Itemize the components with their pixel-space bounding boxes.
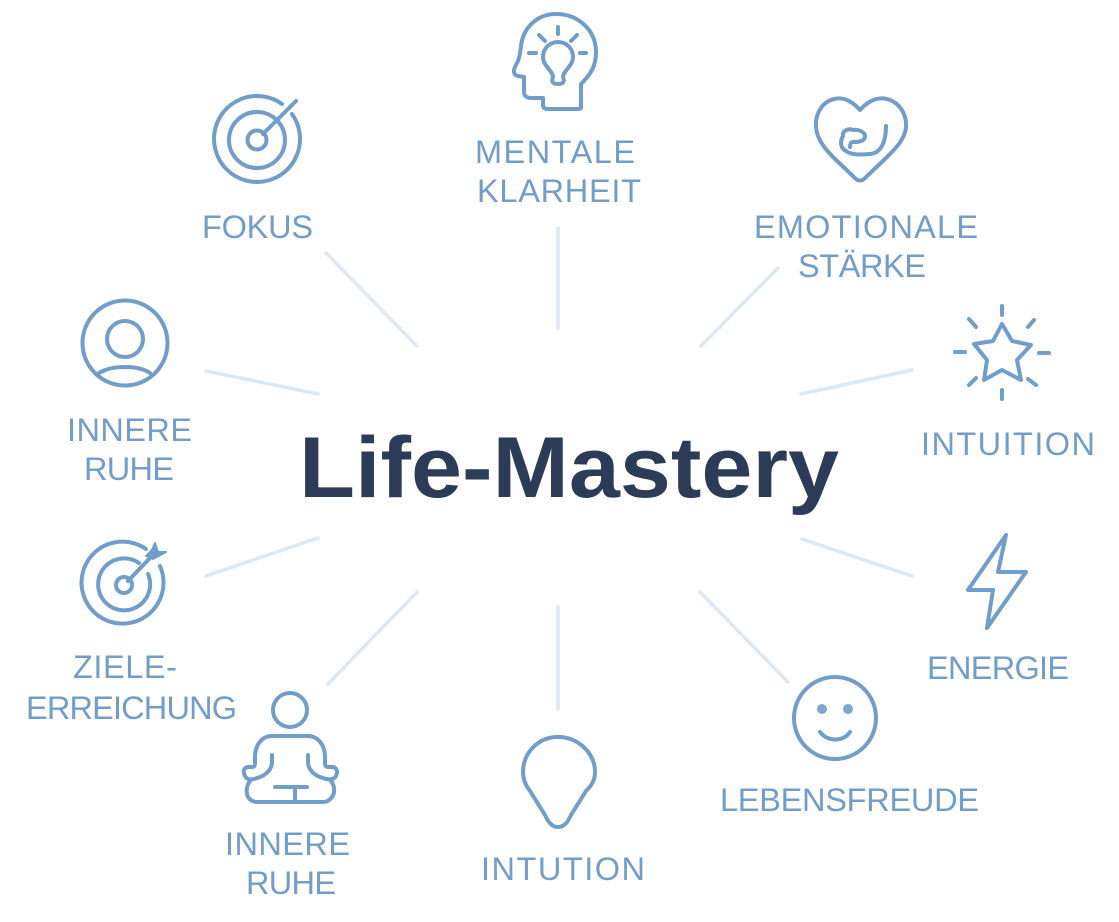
icon: lightning bolt — [968, 535, 1026, 628]
icon: drop pin — [523, 737, 595, 827]
icon: heart with swirl — [816, 98, 906, 180]
label: Intution: INTUTION — [481, 851, 645, 887]
title: Life-Mastery — [299, 420, 839, 516]
label: Ziele-Erreichung: ZIELE- — [73, 649, 177, 685]
icon: head with light bulb — [514, 14, 596, 109]
label: Ziele-Erreichung: ERREICHUNG — [26, 690, 237, 726]
icon: person in circle — [82, 300, 168, 386]
icon: meditating person — [244, 693, 337, 802]
label: Fokus: FOKUS — [202, 209, 313, 245]
label: Innere Ruhe: INNERE — [67, 412, 192, 448]
label: Mentale Klarheit: MENTALE — [475, 134, 635, 170]
icon: target with arrow — [82, 542, 166, 624]
label: Lebensfreude: LEBENSFREUDE — [720, 782, 979, 818]
label: Mentale Klarheit: KLARHEIT — [477, 173, 641, 209]
label: Innere Ruhe, lower: RUHE — [246, 865, 336, 901]
icon: target with line — [214, 96, 300, 182]
label: Innere Ruhe, lower: INNERE — [225, 826, 350, 862]
label: Emotionale Stärke: STÄRKE — [798, 248, 926, 284]
icon: smiley — [794, 677, 876, 759]
icon: star with rays — [955, 306, 1049, 399]
label: Emotionale Stärke: EMOTIONALE — [754, 209, 978, 245]
label: Innere Ruhe: RUHE — [84, 451, 174, 487]
label: Intuition: INTUITION — [921, 426, 1095, 462]
label: Energie: ENERGIE — [927, 650, 1069, 686]
